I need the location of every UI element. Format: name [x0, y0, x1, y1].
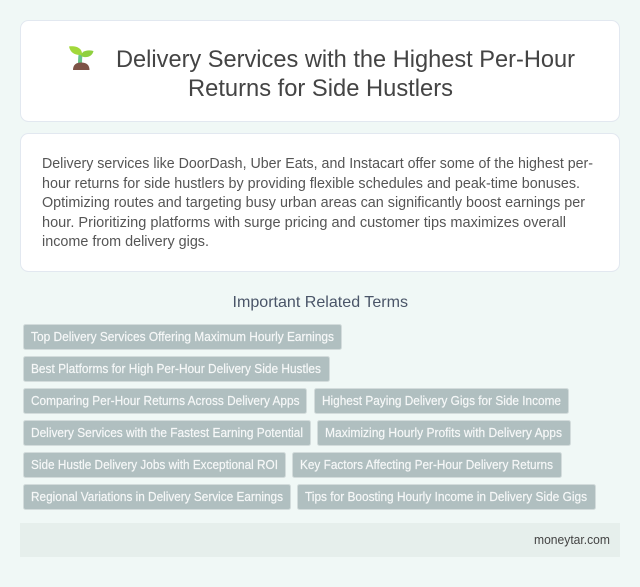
- icon: seedling: [69, 46, 94, 70]
- tag: regional variations: Regional Variations in Delivery Service Earnings: [31, 489, 283, 504]
- tag: key factors: Key Factors Affecting Per-Hour Delivery Returns: [300, 457, 553, 472]
- tag: best platforms: Best Platforms for High Per-Hour Delivery Side Hustles: [31, 361, 321, 376]
- tag: fastest earning potential: [24, 420, 310, 446]
- footer: source: moneytar.com: [534, 533, 610, 547]
- tag: highest paying gigs: [314, 388, 568, 414]
- tag: side hustle delivery jobs: Side Hustle Delivery Jobs with Exceptional ROI: [31, 457, 278, 472]
- panel: summary text: Optimizing routes and targeting busy urban areas can significantly boost earnings per: [42, 195, 585, 211]
- tag: maximizing hourly profits: [318, 420, 570, 446]
- tag: top delivery services: [24, 324, 342, 350]
- panel: title card: [20, 20, 620, 122]
- tag: top delivery services: Top Delivery Services Offering Maximum Hourly Earnings: [31, 329, 334, 344]
- panel: summary text: hour. Prioritizing platforms with surge pricing and customer tips maximizes overall: [42, 215, 566, 231]
- panel: summary text: hour returns for side hustlers by providing flexible schedules and peak-time bonuses.: [42, 176, 580, 192]
- panel: summary text: income from delivery gigs.: [42, 234, 209, 250]
- footer: source: [20, 523, 620, 557]
- tag: comparing per-hour returns: [24, 388, 306, 414]
- tag: highest paying gigs: Highest Paying Delivery Gigs for Side Income: [322, 393, 561, 408]
- title: [116, 46, 575, 102]
- tag: fastest earning potential: Delivery Services with the Fastest Earning Potential: [31, 425, 303, 440]
- tag: tips for boosting income: [298, 484, 596, 510]
- title: Delivery Services with the Highest Per-Hour: [116, 46, 575, 73]
- tag: regional variations: [24, 484, 290, 510]
- panel: summary text: [20, 134, 620, 272]
- tag: key factors: [292, 452, 562, 478]
- tag: maximizing hourly profits: Maximizing Hourly Profits with Delivery Apps: [325, 425, 562, 440]
- tag: side hustle delivery jobs: [24, 452, 286, 478]
- tag: comparing per-hour returns: Comparing Per-Hour Returns Across Delivery Apps: [31, 393, 300, 408]
- panel: summary text: Delivery services like DoorDash, Uber Eats, and Instacart offer some of the highest per-: [42, 156, 593, 172]
- title: Returns for Side Hustlers: [188, 75, 453, 102]
- tag: best platforms: [24, 356, 330, 382]
- tag: tips for boosting income: Tips for Boosting Hourly Income in Delivery Side Gigs: [305, 489, 587, 504]
- heading: important related terms: Important Related Terms: [232, 294, 408, 311]
